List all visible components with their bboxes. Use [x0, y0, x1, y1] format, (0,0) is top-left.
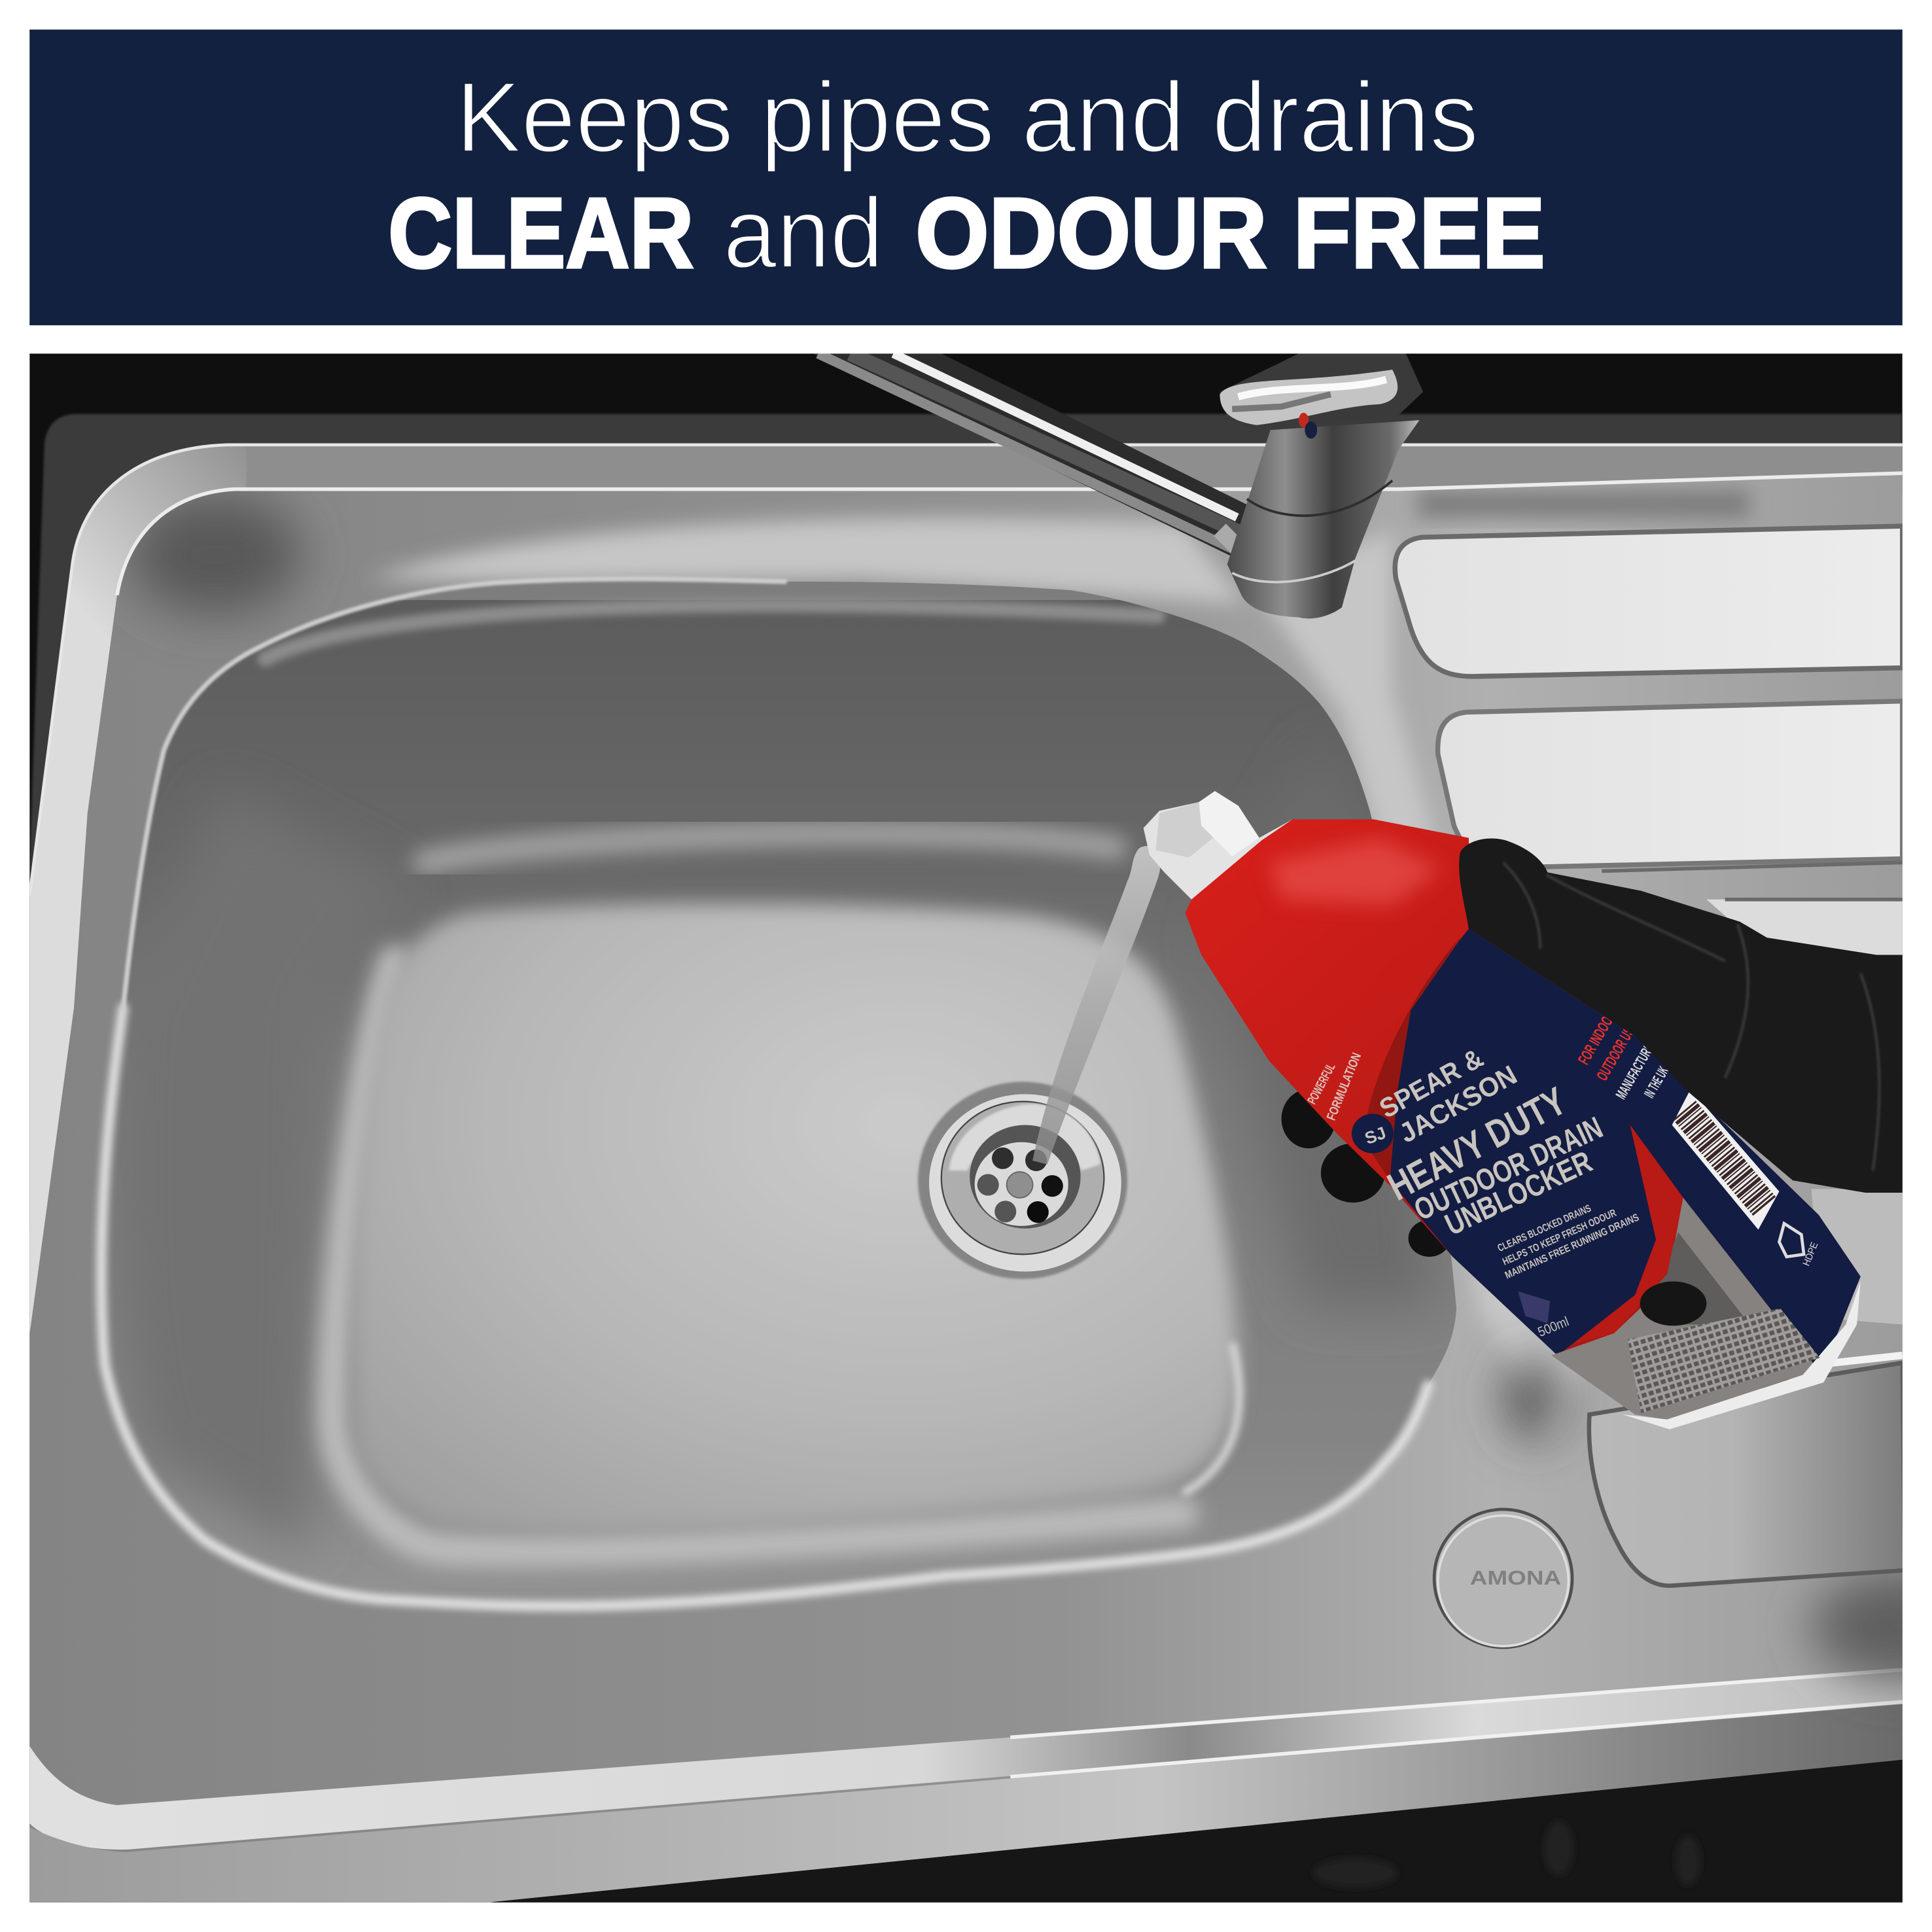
glove folds: [1503, 862, 1879, 1170]
left wall shading: [117, 788, 406, 1553]
sink bowl: [74, 579, 1479, 1643]
bottle highlight: [1269, 838, 1441, 905]
plate glow above bowl: [370, 518, 1244, 604]
translucent red swoosh: [1363, 936, 1462, 1180]
indoor and outdoor use tag: FOR INDOOR: [1575, 1008, 1620, 1068]
indoor and outdoor use tag: OUTDOOR USE: [1594, 1019, 1641, 1084]
brand logo: SJ: [1362, 1123, 1388, 1148]
drainer panel 3: [1706, 900, 1903, 1072]
HDPE mark: HDPE: [1801, 1240, 1820, 1268]
made in UK tag: [1613, 1036, 1672, 1102]
left rim band: [29, 445, 247, 1335]
dark worktop: [29, 354, 1903, 1903]
bowl outer rim: [101, 579, 1456, 1606]
bowl rim upper: [123, 579, 785, 1008]
shaded areas inside rim: [130, 491, 1749, 1441]
title line 2: CLEAR: [388, 178, 694, 289]
drainer panel 5: [1589, 1363, 1905, 1586]
drainer grooves: [1395, 526, 1905, 1586]
title line 2: ODOUR FREE: [915, 178, 1545, 289]
banner: navy heading background: [29, 29, 1903, 325]
lower rim band: [29, 1670, 1905, 1850]
union flag mark: [1518, 1291, 1550, 1324]
product benefits: CLEARS BLOCKED DRAINS: [1496, 1203, 1593, 1254]
top shoulder: [265, 605, 1158, 659]
drainer panel 1: [1395, 526, 1903, 676]
product benefits: HELPS TO KEEP FRESH ODOUR: [1501, 1208, 1618, 1268]
floor lip: [332, 961, 1183, 1551]
made in UK tag: MANUFACTURED: [1613, 1036, 1660, 1102]
drain holes: [977, 1148, 1063, 1223]
drainer panel 2: [1438, 701, 1903, 868]
powerful formulation tag: POWERFUL: [1305, 1061, 1339, 1107]
bottle neck: [1144, 791, 1293, 900]
steel sink plate: [29, 445, 1932, 1907]
right side glare: [1183, 1343, 1239, 1494]
bowl walls: [74, 600, 1479, 1643]
tap body: [1227, 420, 1420, 618]
bottom right granite worktop: [419, 1759, 1905, 1910]
volume: 500ml: [1536, 1314, 1571, 1340]
right wall shading: [1208, 739, 1435, 1306]
powerful formulation tag: [1305, 1051, 1364, 1123]
hot/cold indicator: [1299, 413, 1317, 438]
shadow under bottle: [1507, 1359, 1561, 1438]
title line 1: Keeps pipes and drains: [456, 62, 1479, 173]
brand logo: [1352, 1114, 1394, 1153]
spout: [813, 354, 1248, 565]
concrete photo on label: [1551, 1198, 1823, 1420]
bowl interior clipped: [74, 600, 1479, 1643]
top rim band: [234, 445, 1903, 488]
dark right reflection: [1811, 1571, 1932, 1682]
product benefits: MAINTAINS FREE RUNNING DRAINS: [1503, 1212, 1641, 1282]
lower rim highlight lines: [1010, 1670, 1905, 1777]
product name: HEAVY DUTY: [1380, 1078, 1573, 1209]
glove thumb over bottle: [1459, 839, 1907, 1193]
bowl bright rim lower: [101, 1008, 1428, 1606]
product name: UNBLOCKER: [1439, 1144, 1597, 1242]
drain: [918, 1082, 1127, 1279]
front lip below rim: [29, 1704, 1905, 1907]
dark corner inside rim: [130, 495, 302, 614]
indoor and outdoor use tag: [1575, 1008, 1641, 1084]
brand name: SPEAR &: [1374, 1042, 1488, 1124]
title line 2: and: [723, 178, 883, 289]
powerful formulation tag: FORMULATION: [1324, 1051, 1364, 1123]
drain well: [970, 1125, 1081, 1229]
product name: OUTDOOR DRAIN: [1409, 1110, 1607, 1227]
navy label: [1390, 929, 1861, 1367]
brand name: JACKSON: [1394, 1059, 1522, 1149]
red swoosh sliver: [1572, 1125, 1683, 1344]
bowl floor: [352, 904, 1238, 1532]
made in UK tag: IN THE UK: [1641, 1064, 1672, 1100]
plug cap brand: AMONA: [1470, 1568, 1561, 1589]
tap lever: [1220, 354, 1423, 430]
drain screw: [1007, 1172, 1033, 1198]
photo: sink with bottle being poured: [29, 354, 1932, 1910]
sink back lip: [29, 414, 1903, 1232]
plug cap: [1434, 1509, 1572, 1647]
bottle body: [1186, 819, 1861, 1420]
rim highlights: [29, 445, 1903, 896]
product bottle: [1144, 791, 1907, 1430]
title line 2: [388, 178, 1545, 289]
white base lip: [1623, 1282, 1861, 1430]
tap: [813, 354, 1423, 618]
liquid stream: [1032, 846, 1161, 1165]
recycling icon: [1779, 1223, 1820, 1268]
plate glow right of bowl: [1257, 530, 1589, 1441]
product name: [1380, 1078, 1607, 1242]
title: [388, 62, 1545, 289]
gloved fingers behind bottle: [1282, 1089, 1450, 1257]
ledge highlight: [425, 834, 1115, 862]
drainer panel 4: [1811, 1189, 1903, 1325]
barcode: [1672, 1089, 1779, 1230]
thumb spot on label: [1640, 1282, 1706, 1326]
drain grate on label: [1628, 1308, 1820, 1413]
